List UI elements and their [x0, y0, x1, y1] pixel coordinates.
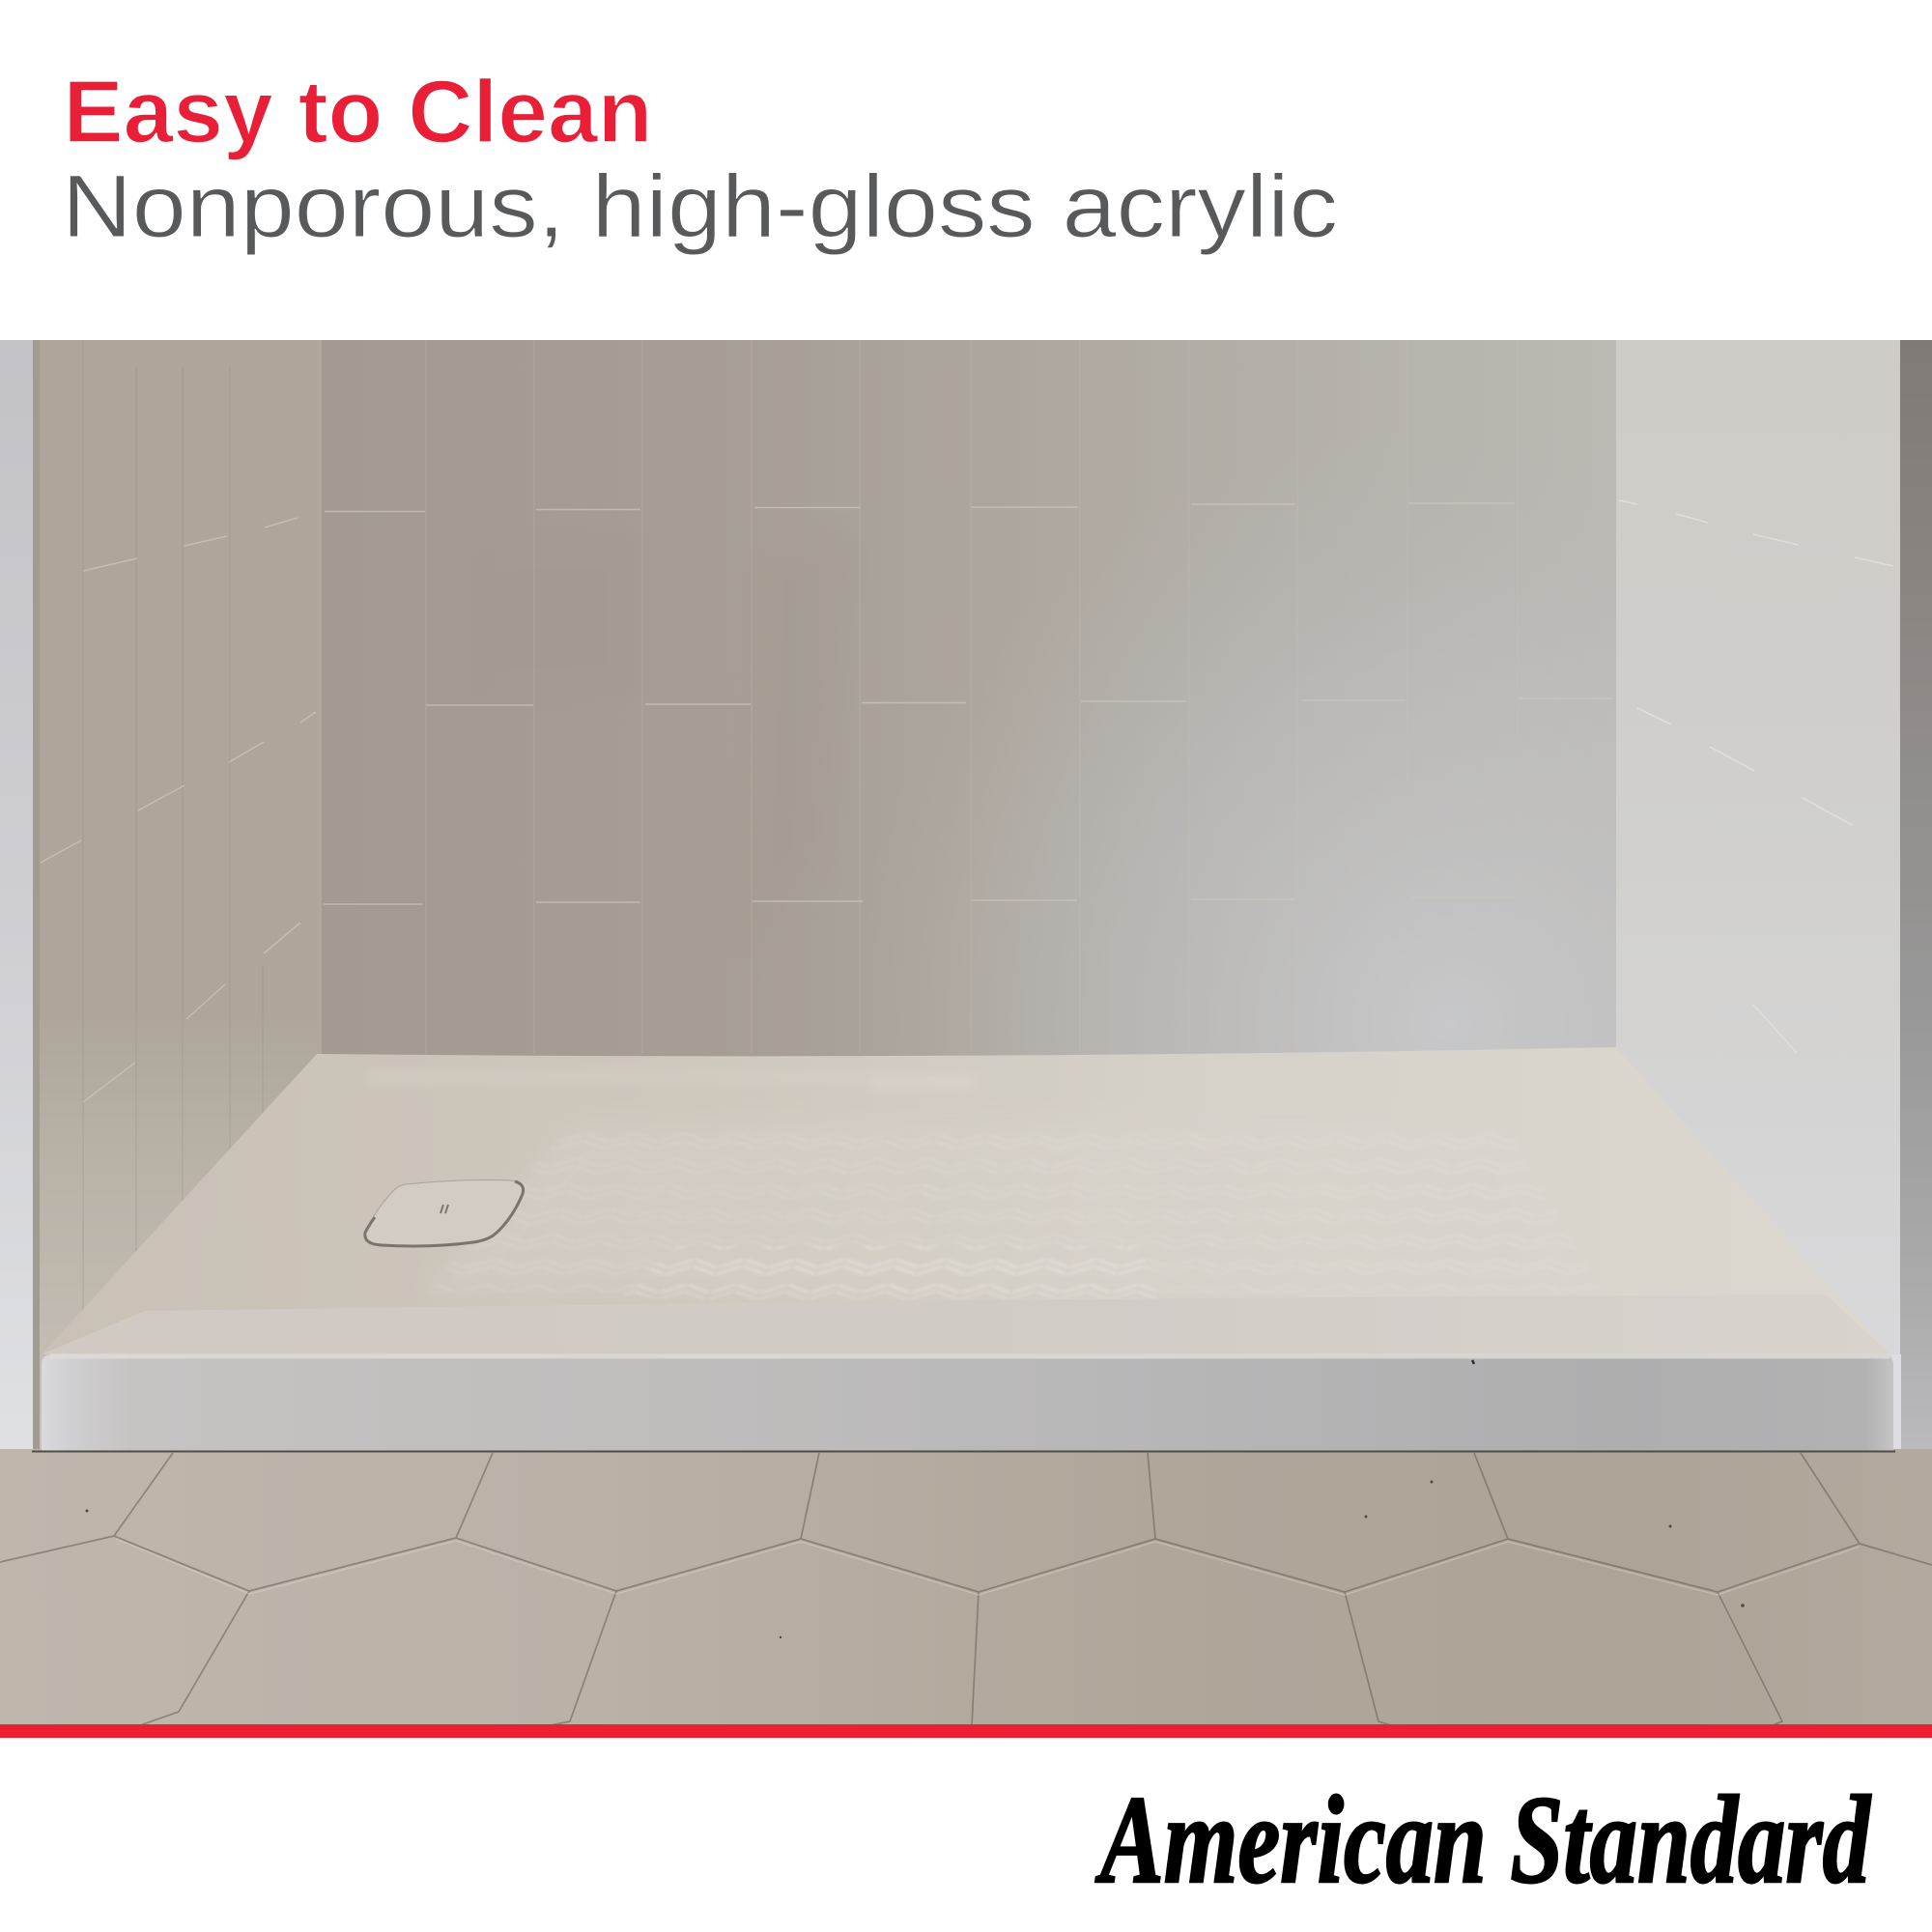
hexagon tile grout lines: [0, 1453, 1932, 1725]
anti-slip herringbone texture: [425, 1125, 1604, 1293]
rim highlight at the back edge: [869, 1074, 976, 1090]
panel: shower photo: [0, 340, 1932, 1725]
back wall: [319, 340, 1618, 1074]
subheading: Nonporous, high-gloss acrylic: Nonporous, high-gloss acrylic: [62, 157, 1338, 256]
right wall: [1616, 340, 1900, 1461]
shower tray top surface: [42, 1047, 1890, 1354]
left pillar: [0, 340, 33, 1461]
red divider bar: [0, 1724, 1932, 1738]
heading: Easy to Clean: Easy to Clean: [64, 63, 653, 161]
tray front face: [32, 1354, 1895, 1451]
floor: [0, 1449, 1932, 1725]
right pillar: [1900, 340, 1932, 1449]
front lip of tray: [43, 1298, 1155, 1354]
left wall: [32, 340, 322, 1461]
drain cover: [365, 1180, 524, 1246]
